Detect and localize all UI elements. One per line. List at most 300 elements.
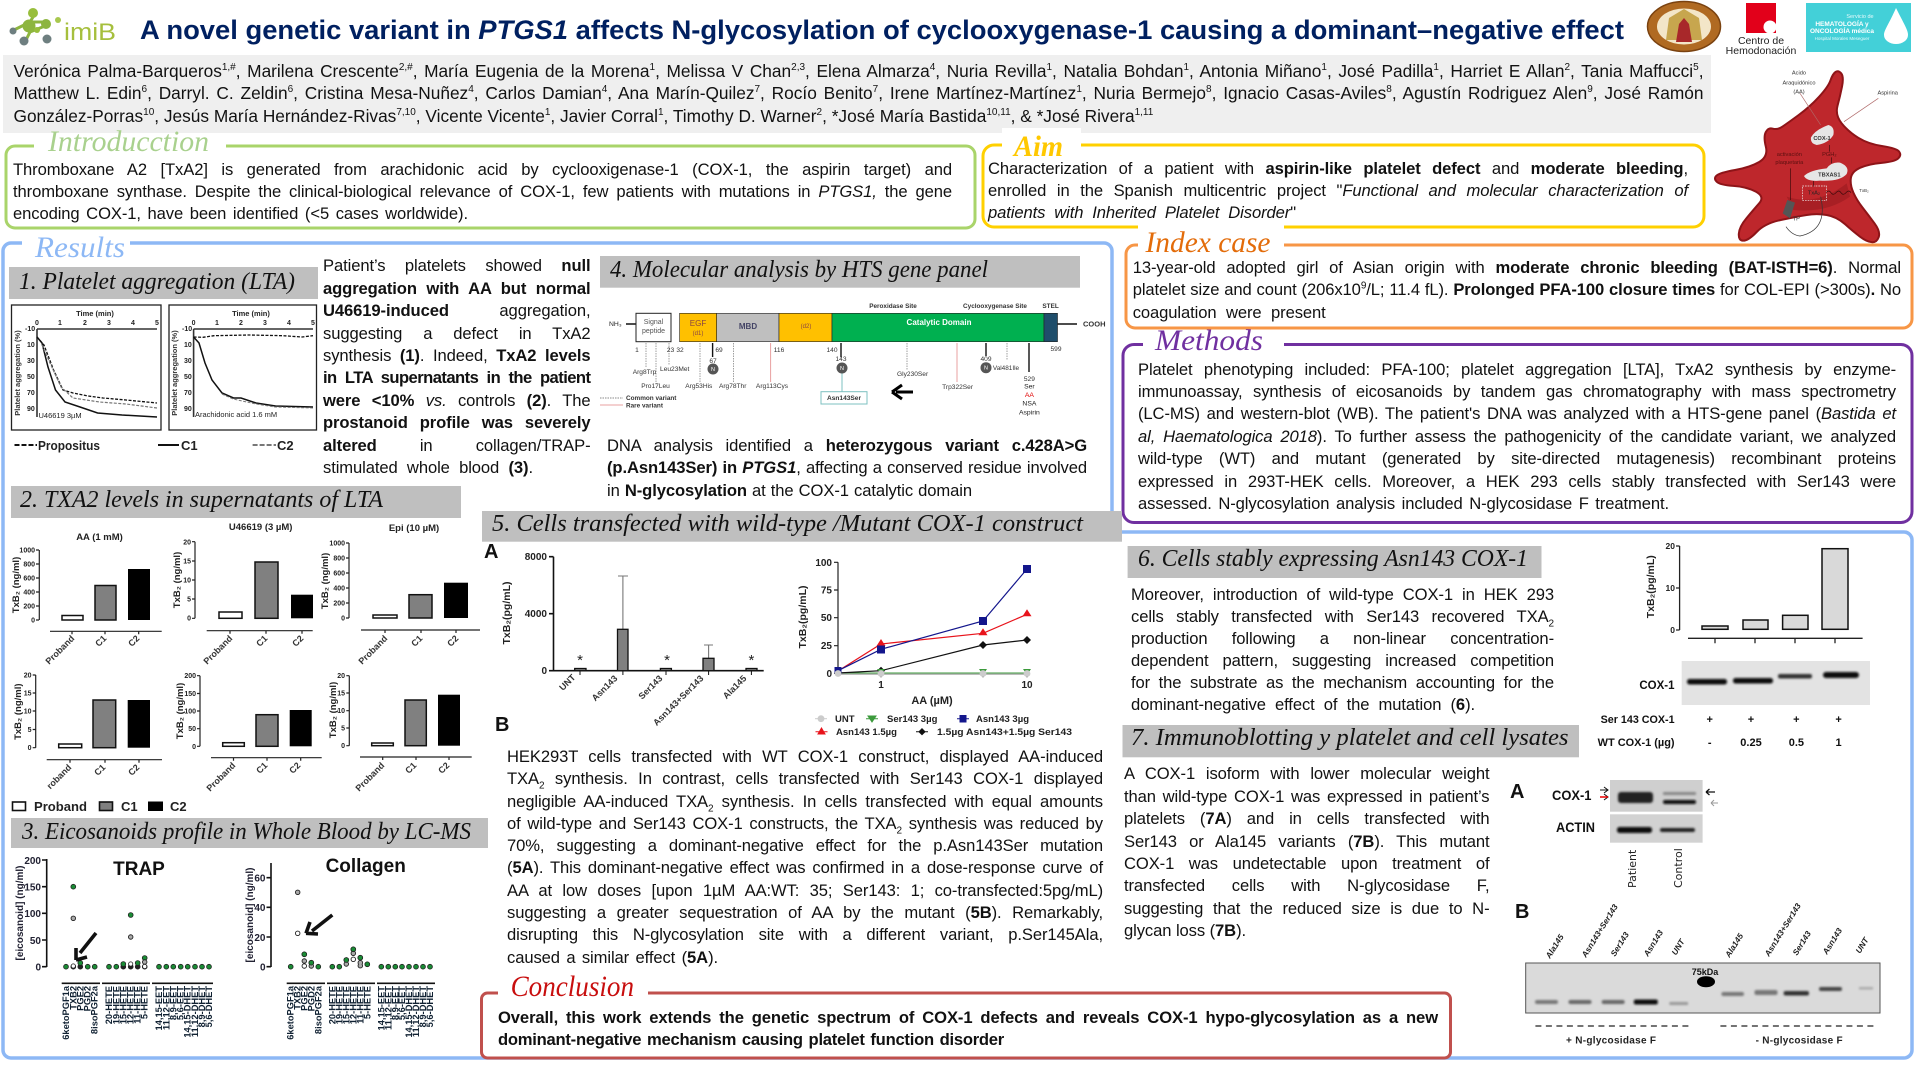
- dot plot: TRAP: [eicosanoid] (ng/ml): [15, 866, 26, 960]
- bar chart: row 2 middle: 100: [184, 708, 196, 716]
- gene diagram: Gly230Ser: [897, 371, 929, 378]
- bar chart: U46619: 5: [187, 596, 191, 604]
- aggregation chart: U46619: Time (min): [76, 309, 114, 318]
- text: platelet aggregation findings: suggesting a defect in TxA2: [323, 324, 590, 343]
- line chart: dose response: [797, 558, 1072, 738]
- text: cells stably expressing: Moreover, introduction of wild-type COX-1 in HEK 293: [1131, 585, 1554, 604]
- bar chart: row 2 left: TxB₂ (ng/ml): [13, 683, 24, 740]
- panel: introduction: [6, 125, 975, 228]
- platelet illustration: TxB₂: [1859, 188, 1869, 193]
- dot plot: Collagen: PGD2: [306, 986, 316, 1011]
- text: platelet aggregation findings: altered in collagen/TRAP-: [323, 436, 590, 455]
- aggregation chart: U46619: [12, 305, 161, 430]
- text: aim: patients with Inherited Platelet Disorder": [988, 203, 1296, 222]
- dot plot: TRAP: 14,15-DHET: [183, 986, 193, 1038]
- dot plot: TRAP: 50: [30, 936, 41, 947]
- dot plot: TRAP: TRAP: [113, 859, 165, 880]
- dot plot: Collagen: [245, 856, 435, 1040]
- gene diagram: Pro17Leu: [641, 383, 670, 390]
- text: cells stably expressing: dependent pattern, suggesting increased competition: [1131, 651, 1554, 670]
- line chart legend: Ser143 3µg: [887, 714, 938, 725]
- aggregation chart: U46619: 70: [27, 390, 35, 397]
- bar chart: TxB2 by construct: 8000: [525, 552, 547, 563]
- text: methods: al, Haematologica 2018). To further assess the pathogenicity of the candidate variant, we analyzed: [1138, 427, 1896, 446]
- dot plot: Collagen: 60: [254, 874, 266, 884]
- western blot: N-glycosidase F: UNT: [1854, 935, 1871, 955]
- dot plot: Collagen: 8,9-DHET: [418, 986, 428, 1027]
- gene diagram: (d2): [801, 324, 811, 330]
- gene diagram: 1: [635, 347, 639, 354]
- gene diagram: (d1): [693, 331, 703, 337]
- gene diagram: 140: [826, 347, 838, 354]
- logo: Centro de Hemodonación: [1726, 3, 1796, 57]
- line chart legend: [815, 714, 1072, 738]
- dot plot: Collagen: 20-HETE: [327, 986, 337, 1024]
- panel: aim: Aim: [1012, 130, 1063, 163]
- bar chart: U46619: C2: [290, 633, 305, 649]
- bar chart: row 2 middle: Proband: [205, 760, 237, 793]
- bar legend: C2: [170, 799, 187, 814]
- bar chart: TxB2 by construct: TxB₂(pg/mL): [501, 582, 513, 644]
- authors background: [3, 55, 1711, 133]
- bar chart: Epi: C1: [409, 633, 424, 649]
- text: platelet aggregation findings: synthesis (1). Indeed, TxA2 levels: [323, 346, 590, 365]
- western blot labels: +: [1748, 714, 1754, 726]
- bar chart: TxB2 by construct: [501, 552, 764, 728]
- aggregation chart: arachidonic acid: 2: [239, 320, 243, 327]
- text: index case: platelet size and count (206x109/L; 11.4 fL). Prolonged PFA-100 closure times for COL-EPI (>300s). No: [1133, 280, 1901, 299]
- dot plot: Collagen: 11-HETE: [355, 986, 365, 1024]
- text: immunoblotting: glycan loss (7B).: [1124, 921, 1246, 940]
- bar chart: TxB2 by construct: Ala145: [721, 673, 748, 701]
- bar chart: row 2 middle: C1: [254, 760, 269, 776]
- western blot: N-glycosidase F: Asn143: [1821, 926, 1844, 957]
- dot plot: Collagen: 5,6-DHET: [425, 986, 435, 1027]
- aggregation chart: arachidonic acid: Time (min): [232, 309, 270, 318]
- text: conclusion: dominant-negative mechanism causing platelet function disorder: [498, 1030, 1004, 1049]
- text: molecular analysis: (p.Asn143Ser) in PTGS1, affecting a conserved residue involved: [607, 458, 1087, 477]
- bar chart: Ser143 with WT COX-1: [1645, 541, 1863, 643]
- dot plot: Collagen: 40: [254, 903, 266, 914]
- bar legend: Proband: [34, 799, 87, 814]
- text: cells transfected: of wild-type and Ser143 COX-1 constructs, the TXA2 synthesis was reduced by: [507, 814, 1103, 836]
- bar chart: row 2 right: 10: [337, 708, 345, 715]
- heading 2: 2. TXA2 levels in supernatants of LTA: [20, 487, 383, 513]
- gene diagram: Asn143Ser: [827, 395, 861, 402]
- western blot: patient vs control: COX-1: [1552, 787, 1592, 803]
- dot plot: TRAP: 100: [24, 909, 41, 920]
- western blot: N-glycosidase F: Asn143+Ser143: [1580, 902, 1620, 960]
- bar chart: Ser143 with WT COX-1: 0: [1670, 625, 1675, 635]
- gene diagram: Arg113Cys: [756, 383, 789, 390]
- dot plot: Collagen: TXB2: [293, 986, 303, 1010]
- platelet illustration: Araquidónico: [1782, 80, 1816, 86]
- line chart: dose response: TxB₂(pg/mL): [797, 586, 809, 648]
- aggregation legend: [14, 438, 294, 453]
- dot plot: TRAP: 12-HETE: [126, 986, 136, 1024]
- text: introduction: [13, 160, 952, 223]
- text: methods: immunoassay, synthesis of eicosanoids by tandem gas chromatography with mass spectrometry: [1138, 382, 1896, 401]
- text: cells transfected: [507, 747, 1104, 967]
- text: platelet aggregation findings: stimulated whole blood (3).: [323, 458, 533, 477]
- western blot: N-glycosidase F: Asn143: [1642, 928, 1665, 959]
- bar chart: row 2 right: TxB₂ (ng/ml): [328, 682, 339, 738]
- gene diagram: Arg53His: [685, 383, 713, 390]
- text: cells transfected: HEK293T cells transfected with WT COX-1 construct, displayed AA-induced: [507, 747, 1103, 766]
- bar chart: Epi: [320, 523, 480, 666]
- panel: aim: [983, 128, 1704, 227]
- bar chart: row 2 right: 20: [337, 673, 345, 680]
- text: molecular analysis: DNA analysis identified a heterozygous variant c.428A>G: [607, 436, 1087, 455]
- line chart: dose response: 75: [821, 586, 832, 596]
- text: methods: expressed in 293T-HEK cells. Moreover, a HEK 293 cells stably transfected with Ser143 were: [1138, 472, 1896, 491]
- aggregation legend: C2: [277, 438, 294, 453]
- bar chart: TxB2 by construct: *: [748, 652, 754, 669]
- aggregation chart: arachidonic acid: Platelet aggregation (%): [170, 330, 179, 416]
- text: immunoblotting: platelets (7A) and in cells transfected with: [1124, 809, 1490, 828]
- text: index case: [1133, 258, 1901, 322]
- heading 7: 7. Immunoblotting y platelet and cell lysates: [1131, 725, 1568, 751]
- aggregation chart: U46619: -10: [25, 326, 35, 333]
- bar chart: row 2 middle: 50: [188, 726, 196, 733]
- western blot: patient vs control: [1552, 780, 1718, 888]
- dot plot: TRAP: 200: [24, 856, 41, 867]
- western blot: N-glycosidase F: - N-glycosidase F: [1756, 1036, 1843, 1046]
- western blot labels: 1: [1836, 737, 1842, 749]
- gene diagram: 143: [835, 356, 847, 363]
- line chart legend: Asn143 3µg: [976, 714, 1029, 725]
- aggregation chart: U46619: 10: [27, 342, 35, 349]
- text: cells stably expressing: cells stably transfected with Ser143 recovered TXA2: [1131, 607, 1554, 629]
- gene diagram: AA: [1025, 392, 1034, 399]
- western blot: N-glycosidase F: Ala145: [1544, 933, 1566, 961]
- gene diagram: 599: [1050, 346, 1062, 353]
- text: methods: wild-type (WT) and mutant (generated by site-directed mutagenesis) recombinant proteins: [1138, 449, 1896, 468]
- text: cells transfected: caused a similar effect (5A).: [507, 948, 718, 967]
- dot plot: TRAP: [15, 856, 214, 1040]
- aggregation chart: U46619: Platelet aggregation (%): [13, 330, 22, 416]
- dot plot: Collagen: 8isoPGF2a: [313, 985, 323, 1034]
- bar chart: Epi: Epi (10 µM): [389, 523, 439, 534]
- line chart: dose response: 10: [1021, 680, 1033, 691]
- bar chart: row 2 left: 15: [24, 690, 32, 698]
- text: platelet aggregation findings: [323, 256, 591, 477]
- platelet illustration: Aspirina: [1877, 91, 1899, 97]
- bar chart: TxB2 by construct: *: [577, 652, 583, 669]
- logo: university seal: [1648, 2, 1720, 52]
- text: platelet aggregation findings: U46619-induced aggregation,: [323, 301, 590, 320]
- bar chart: row 2 middle: 150: [184, 691, 196, 698]
- dot plot: TRAP: 11,12-DHET: [190, 986, 200, 1037]
- bar chart: Epi: 200: [333, 600, 345, 608]
- aggregation chart: arachidonic acid: 90: [184, 406, 192, 413]
- bar chart: row 2 middle: C2: [287, 760, 302, 776]
- western blot labels: +: [1706, 714, 1713, 726]
- gene diagram: 69: [715, 347, 723, 354]
- dot plot: TRAP: 11,12-EET: [161, 986, 171, 1030]
- gene diagram: 67: [709, 358, 717, 365]
- text: platelet aggregation findings: Patient’s platelets showed null: [323, 256, 590, 275]
- gene diagram: Arg78Thr: [719, 383, 747, 390]
- gene diagram: Peroxidase Site: [869, 303, 917, 310]
- gene diagram: Signal: [644, 319, 664, 326]
- text: platelet aggregation findings: prostanoid profile was severely: [323, 413, 590, 432]
- bar chart: U46619: [172, 522, 313, 666]
- dot plot: Collagen: 14,15-EET: [376, 986, 386, 1030]
- bar chart: row 2 left: roband: [45, 762, 73, 791]
- bar chart: AA: C2: [126, 633, 141, 649]
- bar chart: TxB2 by construct: 0: [541, 666, 547, 677]
- gene diagram: NSA: [1022, 400, 1037, 408]
- bar chart: row 2 middle: 200: [184, 673, 196, 680]
- dot plot: Collagen: PGE2: [299, 986, 309, 1011]
- aggregation chart: arachidonic acid: 0: [192, 320, 196, 327]
- western blot labels: [1598, 714, 1842, 749]
- bar chart: AA: 0: [31, 618, 35, 624]
- aggregation chart: arachidonic acid: 30: [184, 358, 192, 365]
- bar chart: AA: [11, 532, 162, 666]
- dot plot: Collagen: 11,12-DHET: [411, 986, 421, 1037]
- panel: results border: [3, 231, 1912, 1058]
- bar chart: row 2 left: 20: [24, 672, 32, 680]
- text: cells stably expressing: dominant-negative effect of the mutation (6).: [1131, 695, 1475, 714]
- bar chart: AA: 400: [23, 590, 35, 596]
- western blot: patient vs control: ACTIN: [1556, 819, 1595, 835]
- text: aim: [988, 158, 1690, 222]
- aggregation chart: arachidonic acid: 70: [184, 390, 192, 397]
- text: cells transfected: suggesting a greater sequestration of AA by the mutant (5B). Remarkably,: [507, 903, 1103, 922]
- western blot: N-glycosidase F: UNT: [1670, 937, 1687, 957]
- bar chart: row 2 left: C1: [92, 762, 107, 778]
- dot plot: TRAP: 15-HETE: [118, 986, 128, 1024]
- platelet illustration: COX-1: [1813, 136, 1831, 142]
- bar legend: [12, 799, 187, 814]
- aggregation chart: arachidonic acid: 4: [287, 320, 291, 327]
- aggregation chart: arachidonic acid: Arachidonic acid 1.6 mM: [195, 410, 277, 419]
- gene diagram: 32: [676, 347, 684, 354]
- text: immunoblotting: transfected cells with N-glycosidase F,: [1124, 876, 1490, 895]
- gene diagram: Arg8Trp: [633, 369, 657, 376]
- gene diagram: Leu23Met: [660, 366, 690, 373]
- bar chart: row 2 right: C2: [436, 760, 451, 776]
- logo: hematología y oncología: ONCOLOGÍA médica: [1810, 26, 1874, 35]
- line chart: dose response: 50: [821, 613, 832, 624]
- bar chart: AA: C1: [93, 633, 108, 649]
- aggregation chart: U46619: 1: [58, 320, 62, 327]
- bar chart: AA: 1000: [19, 548, 35, 554]
- bar chart: row 2 middle: 0: [192, 744, 196, 751]
- text: aim: Characterization of a patient with aspirin-like platelet defect and moderate bleeding,: [988, 158, 1688, 178]
- platelet illustration: Acido: [1792, 71, 1806, 77]
- gene diagram: N: [840, 366, 844, 372]
- dot plot: TRAP: 0: [35, 962, 41, 974]
- text: molecular analysis: [607, 436, 1087, 500]
- gene diagram: STEL: [1042, 303, 1059, 310]
- text: cells stably expressing: [1131, 585, 1554, 714]
- western blot: N-glycosidase F: 75kDa: [1692, 967, 1719, 977]
- text: methods: Platelet phenotyping included: PFA-100; platelet aggregation [LTA], TxA2 synthesis by enzyme-: [1138, 360, 1896, 378]
- dot plot: TRAP: 8,9-DHET: [197, 986, 207, 1027]
- heading 2: [11, 486, 461, 518]
- panel: index case: [1126, 225, 1912, 328]
- text: index case: coagulation were present: [1133, 303, 1326, 322]
- gene diagram: 116: [774, 347, 785, 354]
- label B: B: [495, 714, 509, 736]
- bar chart: TxB2 by construct: Ser143: [636, 673, 664, 701]
- dot plot: TRAP: 11-HETE: [133, 986, 143, 1024]
- aggregation chart: arachidonic acid: 3: [263, 320, 267, 327]
- dot plot: Collagen: 14,15-DHET: [404, 986, 414, 1038]
- bar chart: U46619: U46619 (3 µM): [229, 522, 292, 533]
- gene diagram: Ser: [1024, 384, 1035, 390]
- platelet illustration: [1715, 71, 1900, 242]
- bar chart: U46619: 15: [183, 558, 191, 566]
- aggregation chart: U46619: 90: [27, 406, 35, 413]
- gene diagram: Cyclooxygenase Site: [963, 303, 1027, 310]
- text: molecular analysis: in N-glycosylation at the COX-1 catalytic domain: [607, 481, 972, 500]
- aggregation chart: arachidonic acid: -10: [182, 326, 192, 333]
- bar chart: row 2 left: 5: [28, 727, 32, 734]
- bar chart: AA: AA (1 mM): [76, 532, 123, 543]
- text: methods: (LC-MS) and western-blot (WB). The patient's DNA was analyzed with a HTS-gene panel (Bastida et: [1138, 404, 1896, 423]
- bar chart: Epi: C2: [445, 633, 460, 649]
- dot plot: TRAP: 8,9-EET: [168, 986, 178, 1020]
- bar chart: Epi: 1000: [329, 540, 345, 548]
- bar chart: row 2 right: 0: [341, 743, 345, 750]
- arrow: TRAP: [76, 933, 96, 960]
- heading 6: 6. Cells stably expressing Asn143 COX-1: [1138, 546, 1528, 572]
- arrow: Collagen: [306, 915, 332, 934]
- western blot: N-glycosidase F: Asn143+Ser143: [1763, 901, 1803, 959]
- text: authors: González-Porras10, Jesús María Hernández-Rivas7,10, Vicente Vicente1, Javier Corral1, Timothy D. Warner2, *José María Bastida10,11, & *José Rivera1,11: [14, 106, 1153, 126]
- logo: hematología y oncología: Servicio de: [1846, 14, 1874, 20]
- gene diagram: 23: [667, 347, 675, 354]
- dot plot: Collagen: 20: [254, 933, 266, 944]
- text: cells stably expressing: for the substrate as the mechanism accounting for the: [1131, 673, 1554, 692]
- platelet illustration: plaquetaria: [1775, 160, 1804, 166]
- text: authors: [14, 61, 1704, 126]
- dot plot: Collagen: [eicosanoid] (ng/ml): [245, 868, 256, 962]
- western blot labels: +: [1793, 714, 1800, 726]
- gene diagram: Trp322Ser: [942, 384, 974, 391]
- text: immunoblotting: Ser143 or Ala145 variants (7B). This mutant: [1124, 832, 1490, 851]
- gene diagram: Rare variant: [626, 402, 664, 410]
- text: methods: assessed. N-glycosylation analysis included N-glycosidase F treatment.: [1138, 494, 1669, 513]
- dot plot: TRAP: 8isoPGF2a: [90, 985, 100, 1034]
- bar chart: Epi: 600: [333, 570, 345, 578]
- bar chart: AA: 800: [23, 562, 35, 568]
- gene diagram: peptide: [642, 328, 665, 335]
- dot plot: Collagen: 0: [260, 962, 266, 974]
- panel: results border: Results: [34, 231, 125, 264]
- bar chart: U46619: 10: [183, 578, 191, 584]
- western blot labels: WT COX-1 (µg): [1598, 737, 1675, 749]
- text: aim: enrolled in the Spanish multicentric project "Functional and molecular characterization of: [988, 181, 1688, 200]
- bar chart: row 2 middle: TxB₂ (ng/ml): [175, 683, 186, 739]
- bar chart: TxB2 by construct: *: [664, 652, 670, 669]
- aggregation chart: U46619: 30: [27, 358, 35, 365]
- aggregation chart: U46619: 4: [131, 320, 135, 327]
- text: introduction: thromboxane synthase. Despite the clinical-biological relevance of COX-1, few patients with mutations in PTGS1, the gene: [13, 182, 952, 201]
- panel: methods: Methods: [1154, 324, 1263, 357]
- heading 3: 3. Eicosanoids profile in Whole Blood by LC-MS: [21, 819, 471, 845]
- western blot: N-glycosidase F: Ser143: [1791, 929, 1813, 957]
- western blot labels: -: [1708, 737, 1712, 749]
- western blot: COX-1: COX-1: [1639, 680, 1675, 692]
- western blot labels: 0.25: [1740, 737, 1762, 749]
- text: immunoblotting: than wild-type COX-1 was expressed in patient’s: [1124, 787, 1490, 806]
- label A: A: [484, 541, 498, 563]
- logo: imiB: [10, 8, 116, 46]
- bar chart: row 2 left: C2: [126, 762, 141, 778]
- text: introduction: encoding COX-1, have been identified (<5 cases worldwide).: [13, 204, 468, 223]
- platelet illustration: (AA): [1793, 90, 1805, 96]
- bar chart: TxB2 by construct: Asn143+Ser143: [651, 673, 705, 728]
- western blot: COX-1: [1639, 661, 1870, 705]
- western blot: N-glycosidase F: [1526, 901, 1880, 1046]
- text: methods: [1138, 360, 1897, 513]
- text: index case: 13-year-old adopted girl of Asian origin with moderate chronic bleeding (BAT-ISTH=6). Normal: [1133, 258, 1901, 277]
- gene diagram: Common variant: [626, 395, 677, 402]
- gene diagram: EGF: [690, 319, 706, 328]
- text: authors: Matthew L. Edin6, Darryl. C. Zeldin6, Cristina Mesa-Nuñez4, Carlos Damian4, Ana Marín-Quilez7, Rocío Benito7, Irene Martínez-Martínez1, Nuria Bermejo8, Ignacio Casas-Aviles8, Agustín Rodriguez Alen9, José Ramón: [14, 83, 1703, 103]
- bar chart: Ser143 with WT COX-1: 20: [1666, 541, 1675, 551]
- text: immunoblotting: suggesting that the reduced size is due to N-: [1124, 899, 1490, 918]
- text: platelet aggregation findings: were <10% vs. controls (2). The: [323, 391, 591, 410]
- gene diagram: 529: [1024, 376, 1035, 383]
- bar chart: U46619: TxB₂ (ng/ml): [172, 552, 183, 608]
- aggregation chart: arachidonic acid: 5: [311, 320, 315, 327]
- text: cells transfected: 70%, suggesting a dominant-negative effect for the p.Asn143Ser mutation: [507, 836, 1103, 855]
- label 7A: A: [1510, 781, 1524, 803]
- aggregation chart: U46619: 50: [27, 374, 35, 381]
- gene diagram: N: [711, 367, 715, 373]
- text: platelet aggregation findings: in LTA supernatants in the patient: [323, 368, 590, 387]
- bar chart: Ser143 with WT COX-1: TxB₂(pg/mL): [1645, 555, 1657, 618]
- dot plot: Collagen: Collagen: [326, 856, 406, 877]
- western blot labels: 0.5: [1789, 737, 1804, 749]
- western blot: N-glycosidase F: + N-glycosidase F: [1566, 1036, 1656, 1046]
- platelet illustration: TBXAS1: [1818, 173, 1840, 179]
- western blot: N-glycosidase F: Ala145: [1723, 932, 1745, 960]
- bar chart: U46619: 20: [183, 540, 191, 546]
- label 7B: B: [1515, 901, 1529, 923]
- logo: Centro de Hemodonación: Centro de: [1738, 35, 1784, 47]
- logo: hematología y oncología: [1806, 3, 1911, 52]
- platelet illustration: TxA₂: [1808, 191, 1820, 197]
- heading 5: 5. Cells transfected with wild-type /Mutant COX-1 construct: [492, 511, 1084, 537]
- dot plot: TRAP: 150: [24, 882, 41, 894]
- dot plot: Collagen: 8,9-EET: [390, 986, 400, 1020]
- aggregation chart: arachidonic acid: 10: [184, 342, 192, 349]
- western blot: patient vs control: Control: [1672, 848, 1685, 888]
- text: cells transfected: TXA2 synthesis. In contrast, cells transfected with Ser143 COX-1 displayed: [507, 769, 1103, 792]
- dot plot: Collagen: 15-HETE: [341, 986, 351, 1024]
- bar chart: AA: TxB₂ (ng/ml): [11, 557, 22, 613]
- gene diagram: MBD: [739, 322, 757, 331]
- text: cells transfected: negligible AA-induced TXA2 synthesis. In cells transfected with equal amounts: [507, 792, 1103, 814]
- bar chart: Epi: 0: [341, 616, 345, 622]
- bar chart: row 2 middle: [175, 673, 322, 793]
- gene diagram: COOH: [1083, 320, 1106, 328]
- dot plot: TRAP: PGD2: [83, 986, 93, 1011]
- bar chart: row 2 right: 5: [341, 726, 345, 732]
- dot plot: TRAP: TXB2: [68, 986, 78, 1010]
- line chart legend: 1.5µg Asn143+1.5µg Ser143: [937, 727, 1072, 738]
- bar chart: TxB2 by construct: 4000: [525, 609, 547, 620]
- bar legend: C1: [121, 799, 138, 814]
- bar chart: AA: 600: [23, 576, 35, 582]
